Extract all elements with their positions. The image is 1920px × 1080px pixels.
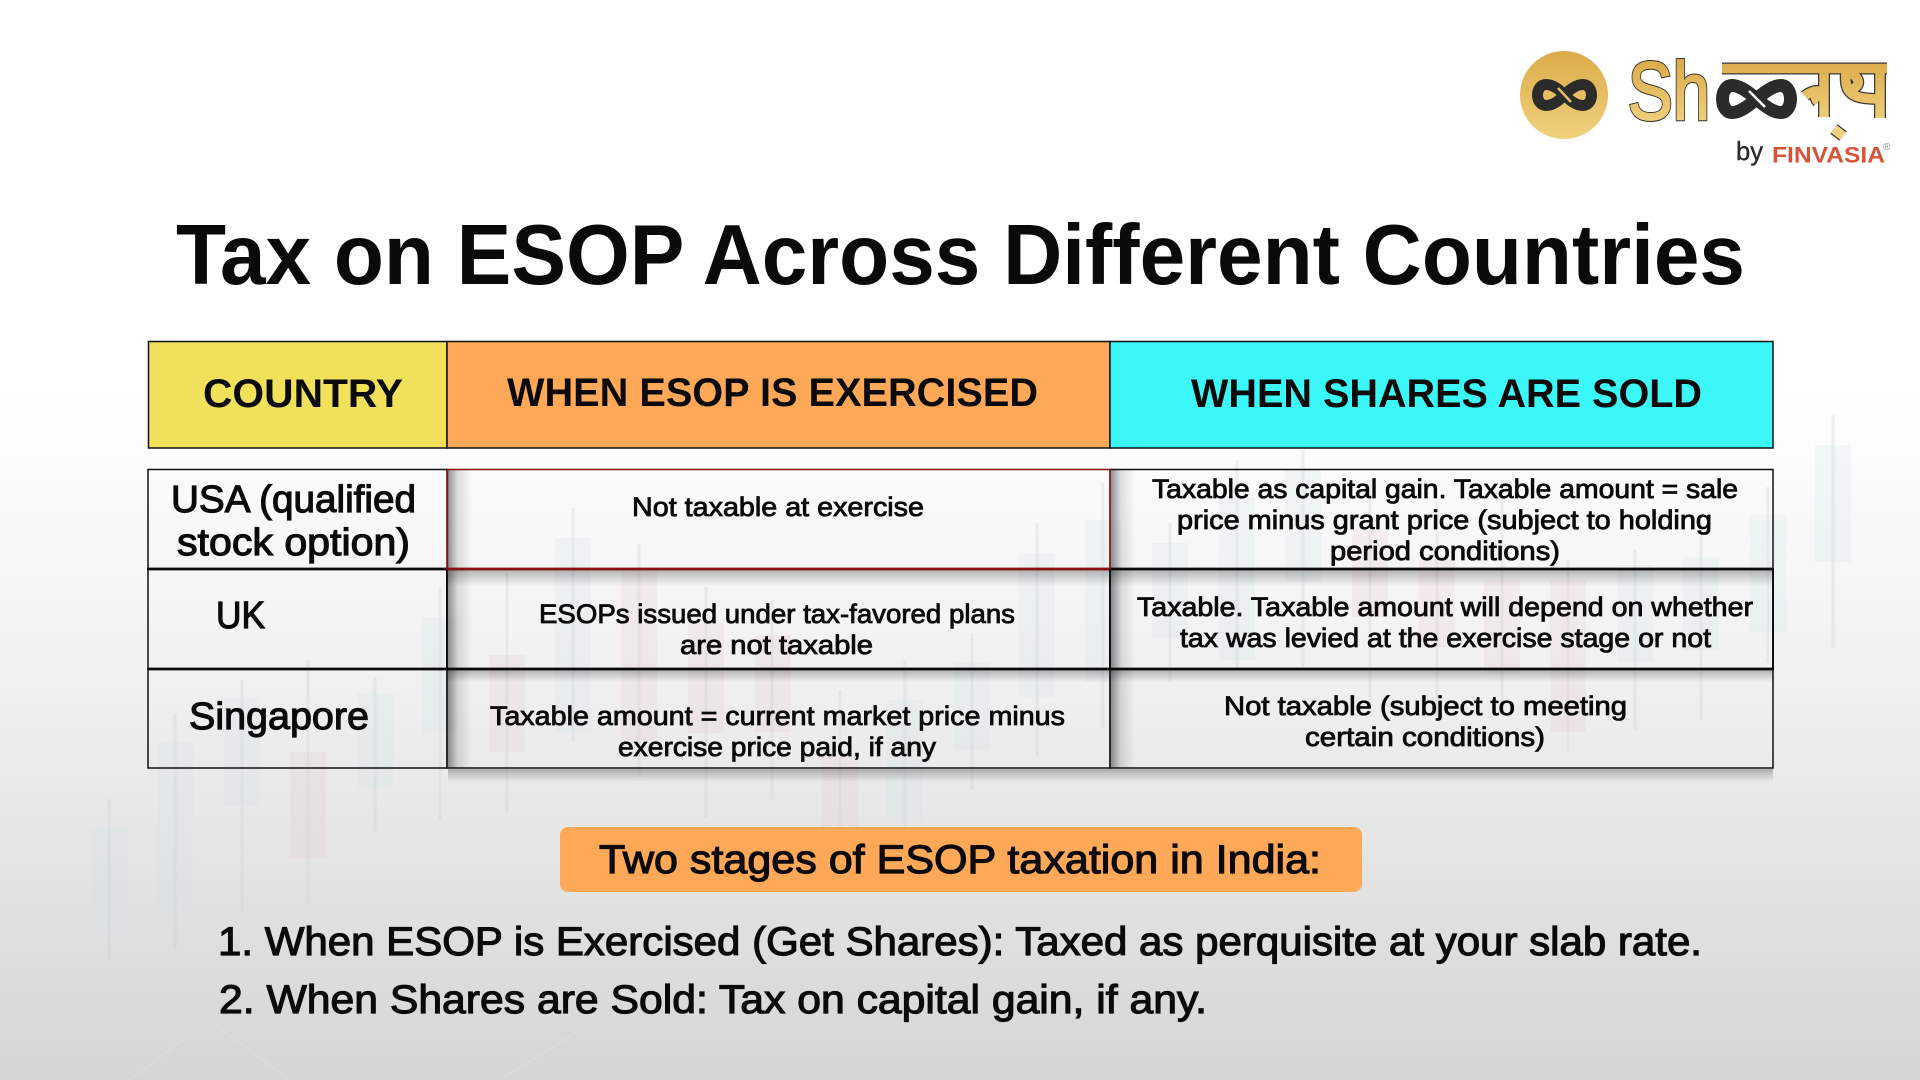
row: UK: are not taxable	[680, 630, 873, 660]
row: UK: UK	[216, 595, 265, 637]
candlestick watermark	[91, 415, 1851, 1080]
callout: two stages heading: Two stages of ESOP taxation in India:	[599, 838, 1321, 882]
row: USA: USA (qualified	[171, 479, 416, 521]
text: stages list	[218, 920, 1702, 1022]
logo ornament fill	[1722, 68, 1887, 136]
callout: two stages heading	[560, 827, 1362, 892]
text: stages list: 2. When Shares are Sold: Tax on capital gain, if any.	[219, 978, 1207, 1022]
row: UK	[148, 569, 1773, 669]
table header row	[148, 342, 1773, 448]
row: Singapore: Taxable amount = current market price minus	[490, 701, 1065, 731]
logo wordmark Sh: Sh	[1628, 46, 1710, 137]
header: when shares are sold: WHEN SHARES ARE SOLD	[1191, 372, 1702, 416]
row: USA: period conditions)	[1330, 536, 1560, 566]
title: Tax on ESOP Across Different Countries	[176, 208, 1745, 303]
row: USA	[147, 470, 1773, 569]
logo wordmark Sh: Sh	[1628, 46, 1710, 137]
row: UK: tax was levied at the exercise stage or not	[1180, 623, 1712, 653]
header: country: COUNTRY	[203, 372, 403, 416]
header: when shares are sold	[1110, 342, 1773, 448]
logo emblem	[1520, 51, 1608, 139]
logo	[1520, 46, 1891, 168]
row: Singapore: exercise price paid, if any	[618, 732, 937, 762]
row: Singapore: Not taxable (subject to meeting	[1224, 691, 1627, 721]
logo by: by	[1736, 136, 1763, 166]
logo finvasia: FINVASIA	[1772, 142, 1885, 168]
row: Singapore	[148, 669, 1773, 768]
header: when ESOP is exercised	[447, 342, 1110, 448]
header: when ESOP is exercised: WHEN ESOP IS EXERCISED	[507, 371, 1038, 415]
row: UK: Taxable. Taxable amount will depend on whether	[1137, 592, 1753, 622]
row: USA: stock option)	[177, 522, 410, 564]
table body	[147, 470, 1773, 768]
table shadows	[448, 469, 1773, 782]
row: USA: Taxable as capital gain. Taxable amount = sale	[1152, 474, 1738, 504]
row: UK: ESOPs issued under tax-favored plans	[539, 599, 1015, 629]
row: USA: Not taxable at exercise	[632, 492, 924, 522]
header: country	[148, 342, 447, 448]
logo infinity mark	[1722, 86, 1790, 112]
row: Singapore: Singapore	[189, 696, 369, 738]
row: USA: price minus grant price (subject to holding	[1177, 505, 1712, 535]
row: Singapore: certain conditions)	[1305, 722, 1545, 752]
logo ornament outline	[1722, 68, 1887, 136]
text: stages list: 1. When ESOP is Exercised (Get Shares): Taxed as perquisite at your slab rate.	[218, 920, 1702, 964]
logo registered mark: ®	[1883, 142, 1891, 153]
